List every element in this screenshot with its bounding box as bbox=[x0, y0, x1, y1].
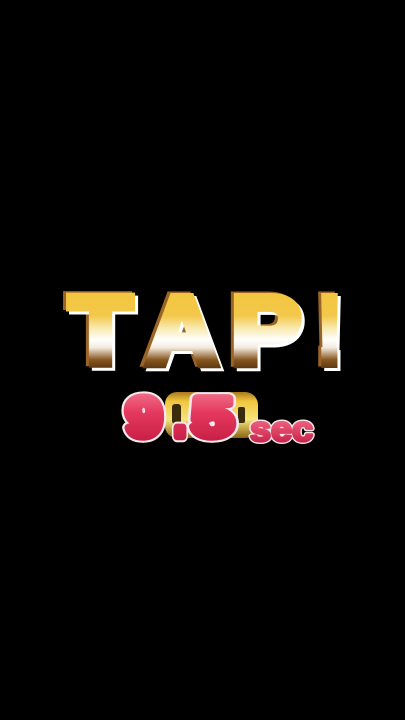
white highlight layer: A bbox=[149, 279, 221, 388]
brown shadow layer: P bbox=[228, 276, 298, 384]
unit: sec: sec bbox=[250, 409, 313, 449]
heading: TAP! bbox=[66, 275, 345, 388]
large red number bbox=[126, 386, 233, 448]
gold gradient face: P bbox=[231, 278, 301, 385]
gold gradient face bbox=[69, 276, 342, 385]
white highlight layer: ! bbox=[320, 280, 345, 388]
gold gradient face: A bbox=[146, 276, 218, 385]
timer: 9.5 sec bbox=[126, 386, 313, 449]
brown shadow layer: A bbox=[143, 275, 215, 383]
white highlight layer: T bbox=[72, 281, 135, 388]
large red number: 9 bbox=[126, 386, 162, 448]
large red number: 5 bbox=[192, 386, 233, 448]
unit: sec: sec bbox=[250, 409, 313, 449]
white highlight layer bbox=[72, 279, 345, 388]
large red number: . bbox=[174, 386, 186, 448]
brown shadow layer bbox=[66, 275, 339, 384]
brown shadow layer: ! bbox=[314, 275, 339, 384]
gold gradient face: T bbox=[69, 278, 132, 385]
large red number: 5 bbox=[192, 386, 233, 448]
gold digits behind bbox=[165, 392, 258, 438]
brown shadow layer: T bbox=[66, 276, 129, 384]
white highlight layer: P bbox=[234, 281, 304, 388]
gold gradient face: ! bbox=[317, 277, 342, 385]
large red number: . bbox=[174, 386, 186, 448]
large red number: 9 bbox=[126, 386, 162, 448]
